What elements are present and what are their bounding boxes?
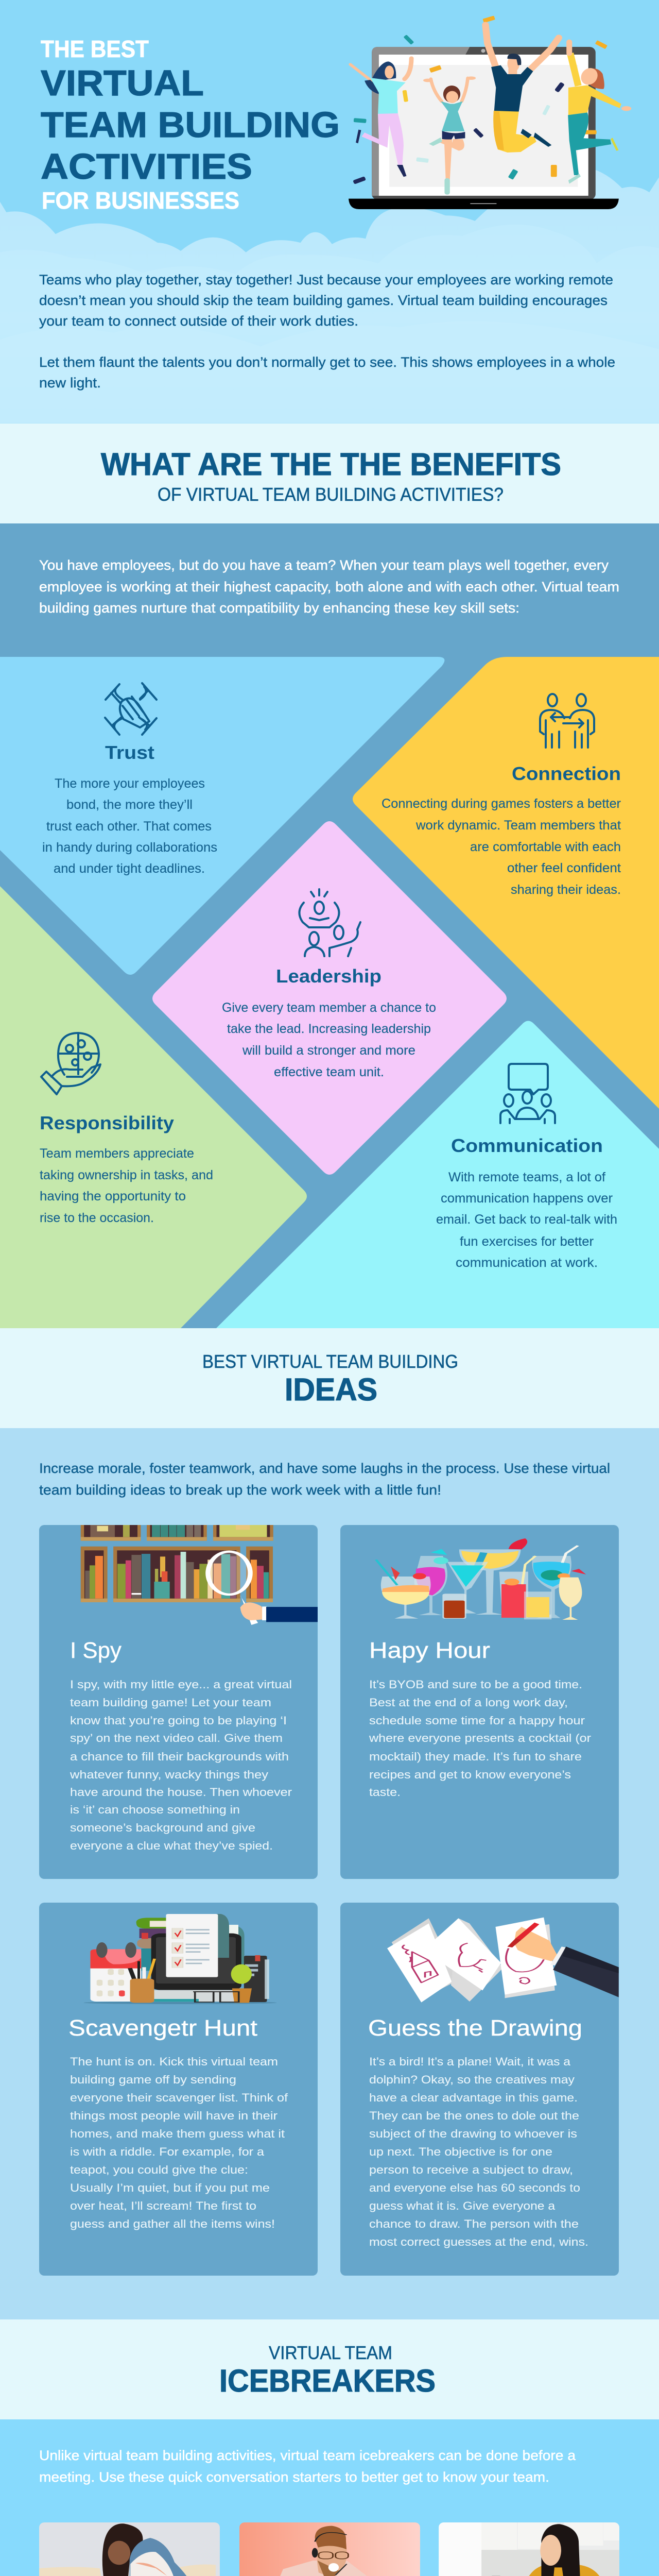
card text: subject of the drawing to whoever is: [369, 2127, 577, 2140]
card text: over heat, I’ll scream! The first to: [70, 2199, 256, 2212]
card text: [70, 1678, 292, 1852]
hero intro text: Let them flaunt the talents you don’t normally get to see. This shows employees in a whole: [39, 354, 615, 370]
card: Show and Tell: [39, 2522, 220, 2576]
icebreakers intro text: meeting. Use these quick conversation starters to better get to know your team.: [39, 2469, 549, 2485]
card text: dolphin? Okay, so the creatives may: [369, 2073, 575, 2086]
panel: hero: [0, 0, 659, 423]
icon: hands: [105, 683, 157, 735]
heading: ideas: BEST VIRTUAL TEAM BUILDING: [202, 1351, 458, 1372]
panel: trust: [0, 657, 444, 975]
connection text: are comfortable with each: [470, 840, 621, 854]
card text: everyone a clue what they’ve spied.: [70, 1839, 273, 1852]
card text: homes, and make them guess what it: [70, 2127, 285, 2140]
hero title: ACTIVITIES: [41, 146, 252, 187]
card text: spy’ on the next video call. Give them: [70, 1732, 283, 1744]
card: Hapy Hour: [340, 1525, 619, 1879]
person: teal shirt: [350, 58, 411, 177]
hero title: THE BEST: [41, 36, 149, 62]
responsibility text: [40, 1146, 213, 1225]
heading: icebreakers: [0, 2319, 659, 2419]
icon: group talking: [500, 1064, 555, 1123]
card text: Usually I’m quiet, but if you put me: [70, 2181, 270, 2194]
card text: [369, 1678, 591, 1799]
connection text: sharing their ideas.: [511, 883, 621, 897]
card text: person to receive a subject to draw,: [369, 2163, 573, 2176]
communication text: With remote teams, a lot of: [448, 1170, 605, 1184]
connection text: other feel confident: [507, 861, 621, 875]
card text: things most people will have in their: [70, 2109, 278, 2122]
card text: mocktail) they made. It’s fun to share: [369, 1750, 582, 1763]
photo: laughing man with headset: [239, 2522, 420, 2576]
photo: woman hugging plush shark: [39, 2522, 220, 2576]
card text: and everyone else has 60 seconds to: [369, 2181, 580, 2194]
trust text: and under tight deadlines.: [54, 861, 205, 876]
heading: ideas: [0, 1328, 659, 1428]
card title: Hapy Hour: [369, 1638, 490, 1663]
ideas intro text: team building ideas to break up the work week with a little fun!: [39, 1482, 441, 1498]
card text: Best at the end of a long work day,: [369, 1696, 568, 1709]
card text: I spy, with my little eye... a great virtual: [70, 1678, 292, 1691]
card text: building game off by sending: [70, 2073, 236, 2086]
heading: ideas: IDEAS: [285, 1372, 377, 1407]
photo: woman eating at table: [439, 2522, 619, 2576]
trust text: trust each other. That comes: [46, 819, 212, 834]
hero title: [41, 36, 340, 214]
card text: have a clear advantage in this game.: [369, 2091, 578, 2104]
icon: two people exchanging: [540, 694, 594, 748]
icon: puzzle in hand: [41, 1033, 100, 1094]
benefits intro text: You have employees, but do you have a team? When your team plays well together, every: [39, 557, 609, 573]
icebreakers intro text: Unlike virtual team building activities, virtual team icebreakers can be done before a: [39, 2448, 576, 2463]
illustration: bookshelf and magnifier: [81, 1523, 318, 1625]
card text: guess what it is. Give everyone a: [369, 2199, 556, 2212]
leadership text: [222, 1001, 436, 1079]
card text: It’s a bird! It’s a plane! Wait, it was a: [369, 2055, 571, 2068]
hero intro text: new light.: [39, 375, 101, 391]
connection text: Connecting during games fosters a better: [381, 796, 621, 811]
card text: schedule some time for a happy hour: [369, 1714, 585, 1727]
responsibility text: rise to the occasion.: [40, 1211, 154, 1225]
communication text: communication at work.: [456, 1256, 598, 1270]
hero title: TEAM BUILDING: [41, 105, 340, 145]
card text: have around the house. Then whoever: [70, 1786, 292, 1799]
leadership text: Give every team member a chance to: [222, 1001, 436, 1015]
connection heading: Connection: [512, 763, 621, 784]
communication text: [436, 1170, 617, 1270]
trust text: bond, the more they’ll: [66, 798, 193, 812]
responsibility text: Team members appreciate: [40, 1146, 194, 1161]
card title: Guess the Drawing: [368, 2015, 582, 2041]
card: I Spy: [39, 1523, 318, 1879]
card: Scavenger Hunt: [39, 1903, 318, 2276]
leadership heading: Leadership: [276, 965, 381, 987]
illustration: checklist desk: [83, 1914, 276, 2004]
panel: icebreakers and footer: [39, 2450, 619, 2576]
card text: a chance to fill their backgrounds with: [70, 1750, 289, 1763]
card text: [70, 2055, 288, 2230]
trust text: [42, 776, 217, 876]
hero intro text: doesn’t mean you should skip the team building games. Virtual team building encourages: [39, 293, 608, 308]
heading: benefits: WHAT ARE THE THE BENEFITS: [101, 447, 561, 482]
card: Snack Time: [439, 2522, 619, 2576]
card text: The hunt is on. Kick this virtual team: [70, 2055, 278, 2068]
card text: It’s BYOB and sure to be a good time.: [369, 1678, 582, 1691]
card text: is ‘it’ can choose something in: [70, 1803, 240, 1816]
heading: icebreakers: VIRTUAL TEAM: [269, 2342, 392, 2363]
card text: chance to draw. The person with the: [369, 2217, 579, 2230]
card text: teapot, you could give the clue:: [70, 2163, 248, 2176]
communication text: fun exercises for better: [460, 1234, 594, 1249]
hero intro text: your team to connect outside of their work duties.: [39, 313, 358, 329]
card: Cry Baby: [239, 2522, 420, 2576]
card text: everyone their scavenger list. Think of: [70, 2091, 288, 2104]
hero title: FOR BUSINESSES: [42, 187, 239, 214]
heading: benefits: [0, 423, 659, 523]
card text: where everyone presents a cocktail (or: [369, 1732, 591, 1744]
card text: someone’s background and give: [70, 1821, 255, 1834]
card text: is with a riddle. For example, for a: [70, 2145, 265, 2158]
card: Guess the Drawing: [340, 1903, 619, 2276]
responsibility text: taking ownership in tasks, and: [40, 1168, 213, 1182]
leadership text: effective team unit.: [274, 1065, 384, 1079]
icon: leader raised by hand: [299, 889, 360, 956]
connection text: [381, 796, 621, 897]
card text: recipes and get to know everyone’s: [369, 1768, 571, 1781]
benefits intro text: building games nurture that compatibility by enhancing these key skill sets:: [39, 600, 519, 616]
panel: ideas: [0, 1428, 659, 2319]
card text: They can be the ones to dole out the: [369, 2109, 579, 2122]
card text: taste.: [369, 1786, 401, 1799]
hero intro text: [39, 272, 615, 391]
card text: most correct guesses at the end, wins.: [369, 2235, 588, 2248]
heading: benefits: OF VIRTUAL TEAM BUILDING ACTIVITIES?: [158, 484, 504, 505]
responsibility text: having the opportunity to: [40, 1189, 186, 1204]
ideas intro text: Increase morale, foster teamwork, and have some laughs in the process. Use these virtual: [39, 1461, 610, 1476]
panel: communication: [216, 1021, 659, 1328]
communication heading: Communication: [451, 1135, 603, 1156]
communication text: email. Get back to real-talk with: [436, 1212, 617, 1227]
responsibility heading: Responsibility: [40, 1112, 174, 1133]
hero clouds: [0, 166, 659, 423]
trust heading: Trust: [105, 742, 154, 763]
communication text: communication happens over: [441, 1191, 613, 1206]
connection text: work dynamic. Team members that: [415, 818, 621, 833]
card text: know that you’re going to be playing ‘I: [70, 1714, 287, 1727]
leadership text: take the lead. Increasing leadership: [227, 1022, 431, 1036]
card text: team building game! Let your team: [70, 1696, 271, 1709]
card text: [369, 2055, 588, 2248]
heading: icebreakers: ICEBREAKERS: [219, 2363, 436, 2398]
leadership text: will build a stronger and more: [242, 1043, 415, 1058]
benefits intro text: [39, 557, 619, 616]
person: yellow shirt: [568, 42, 631, 184]
card text: whatever funny, wacky things they: [70, 1768, 268, 1781]
panel: leadership: [152, 821, 507, 1175]
illustration: drawings and hand: [387, 1918, 619, 2003]
panel: connection: [353, 657, 659, 1109]
panel: benefits: [0, 523, 659, 1328]
icebreakers intro text: [39, 2448, 576, 2485]
card text: up next. The objective is for one: [369, 2145, 552, 2158]
ideas intro text: [39, 1461, 610, 1498]
hero intro text: Teams who play together, stay together! Just because your employees are working remote: [39, 272, 613, 287]
person: girl: [423, 76, 476, 195]
hero title: VIRTUAL: [41, 63, 204, 103]
card title: Scavengetr Hunt: [68, 2015, 257, 2041]
person: man: [485, 25, 559, 152]
benefits intro text: employee is working at their highest capacity, both alone and with each other. Virtual team: [39, 579, 619, 595]
card title: I Spy: [70, 1638, 122, 1663]
trust text: in handy during collaborations: [42, 840, 217, 855]
card text: guess and gather all the items wins!: [70, 2217, 275, 2230]
trust text: The more your employees: [55, 776, 205, 791]
panel: responsibility: [0, 886, 307, 1328]
illustration: cocktails: [376, 1538, 586, 1620]
illustration: laptop with jumping team: [349, 15, 631, 209]
